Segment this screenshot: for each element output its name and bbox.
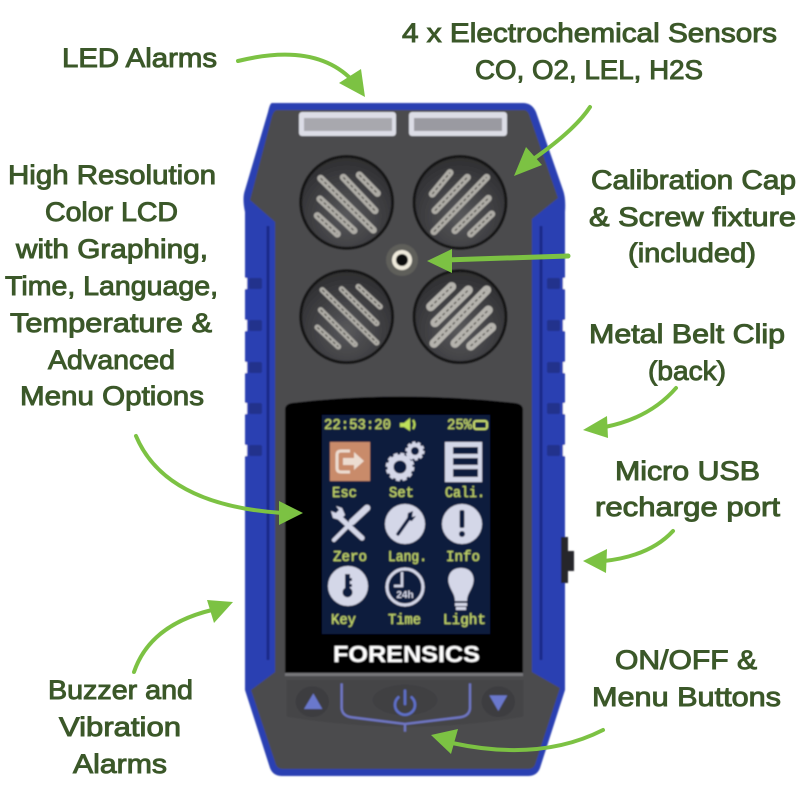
arrow: buzzer: [134, 600, 233, 672]
menu labels: Esc: [332, 485, 357, 502]
label: LCD features: [5, 160, 218, 411]
power button: [373, 685, 437, 715]
arrow: belt clip: [583, 388, 676, 438]
menu labels: Key: [331, 612, 356, 629]
label: LCD features: Temperature &: [10, 308, 212, 338]
label: buzzer: Buzzer and: [48, 675, 193, 705]
label: micro USB: Micro USB: [615, 456, 760, 486]
brand name: FORENSICS: [333, 641, 480, 667]
grey body: [250, 110, 560, 769]
label: LCD features: with Graphing,: [15, 234, 208, 264]
label: on/off buttons: [592, 645, 781, 712]
label: LCD features: Color LCD: [45, 197, 178, 227]
control buttons: [287, 680, 523, 732]
icon: language wrench: [385, 504, 425, 544]
label: belt clip: Metal Belt Clip: [589, 319, 785, 349]
icon: calibration list: [445, 442, 482, 482]
icon: settings gears: [387, 442, 424, 480]
arrow: LED alarms: [238, 55, 365, 97]
menu labels: [331, 485, 486, 629]
label: electrochemical sensors: [402, 18, 777, 85]
label: electrochemical sensors: 4 x Electrochemical Sensors: [402, 18, 777, 48]
label: LCD features: Time, Language,: [5, 271, 218, 301]
edge scallops: [242, 278, 568, 456]
icon: 24h clock: 24h: [396, 590, 414, 601]
menu labels: Cali.: [445, 485, 485, 502]
micro USB port cover: [561, 537, 574, 583]
arrow: LCD: [136, 436, 303, 525]
label: on/off buttons: Menu Buttons: [592, 682, 781, 712]
label: LCD features: Advanced: [48, 345, 175, 375]
screen bezel: [285, 396, 523, 673]
gas detector device: [242, 103, 574, 776]
status bar: [324, 417, 487, 434]
menu labels: Zero: [333, 549, 367, 566]
label: calibration cap: Calibration Cap: [591, 165, 796, 195]
label: calibration cap: [589, 165, 796, 268]
menu labels: Lang.: [388, 549, 427, 566]
label: LCD features: Menu Options: [20, 381, 204, 411]
label: belt clip: (back): [648, 356, 726, 386]
label: micro USB: [595, 456, 781, 522]
LED alarm windows: [299, 112, 507, 136]
arrow: menu buttons: [431, 729, 603, 754]
label: micro USB: recharge port: [595, 492, 781, 522]
label: electrochemical sensors: CO, O2, LEL, H2S: [475, 55, 703, 85]
dark inner stripes: [268, 226, 541, 660]
label: LED alarms: LED Alarms: [62, 43, 217, 73]
icon: esc: [330, 442, 370, 481]
button recess: [287, 680, 523, 727]
status bar: 22:53:20: [324, 417, 391, 434]
menu labels: Set: [389, 485, 414, 502]
label: buzzer: [48, 675, 193, 779]
icon: crossed tools: [331, 506, 367, 540]
arrow: sensors: [514, 107, 590, 176]
status bar: 25%: [447, 417, 473, 434]
LCD panel: [322, 415, 490, 634]
menu labels: Light: [443, 612, 486, 629]
up button: [296, 686, 329, 717]
label: buzzer: Alarms: [73, 749, 167, 779]
menu labels: Info: [446, 549, 480, 566]
label: calibration cap: (included): [628, 238, 756, 268]
arrow: calibration cap: [427, 249, 568, 273]
down button: [482, 686, 515, 717]
side grip notches: [249, 278, 560, 456]
bezel edge: [285, 673, 523, 676]
icon: light bulb: [448, 568, 474, 610]
icon: info: [442, 504, 482, 544]
four sensors: [301, 156, 506, 363]
label: buzzer: Vibration: [59, 712, 181, 742]
icon: key: [328, 566, 368, 606]
label: LCD features: High Resolution: [8, 160, 216, 190]
blue rubber housing: [244, 103, 565, 776]
power frame: [342, 683, 470, 732]
label: belt clip: [589, 319, 785, 386]
arrow: USB port: [583, 531, 673, 573]
menu labels: Time: [388, 612, 421, 629]
calibration screw hole: [386, 244, 418, 276]
icon: 24h clock: [387, 569, 423, 605]
label: calibration cap: & Screw fixture: [589, 202, 796, 232]
label: on/off buttons: ON/OFF &: [615, 645, 757, 675]
